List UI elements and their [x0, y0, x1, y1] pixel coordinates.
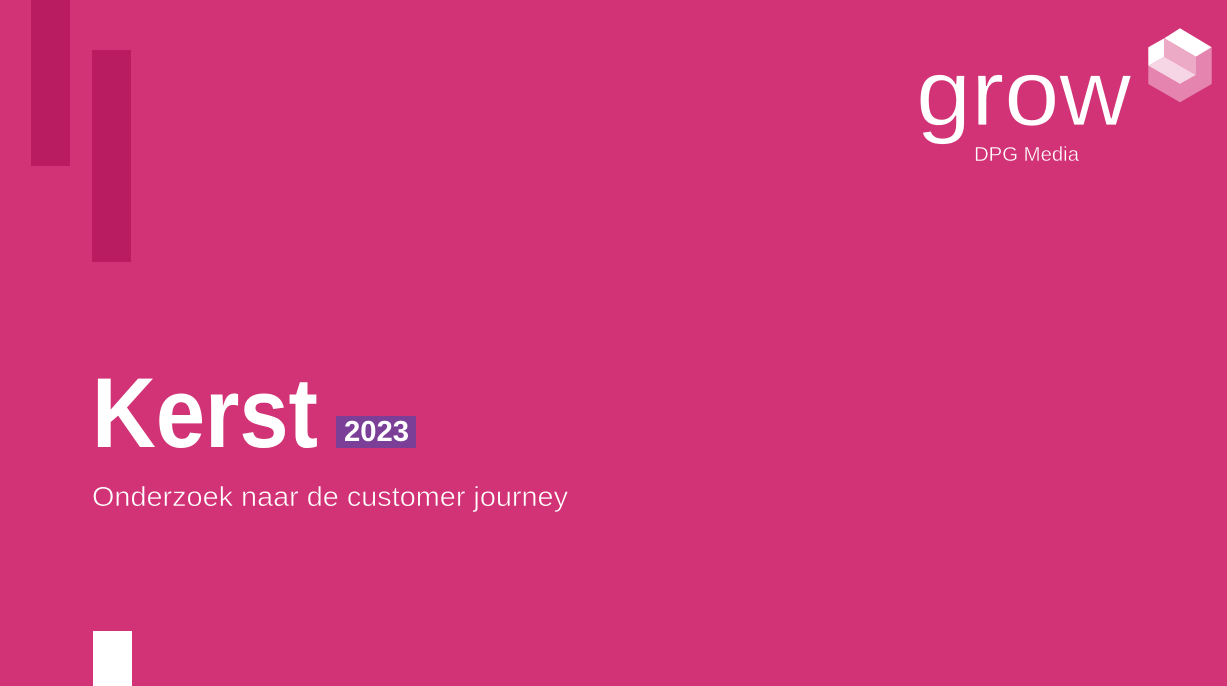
decorative bar: left dark pink: [31, 0, 70, 166]
decorative block: white bottom: [93, 631, 132, 686]
logo: grow DPG Media: [916, 28, 1212, 166]
logo subtitle: DPG Media: DPG Media: [974, 144, 1080, 166]
logo wordmark: grow: grow: [916, 40, 1132, 145]
decorative bar: middle dark pink: [92, 50, 131, 262]
icon: hexagonal cube: [1148, 28, 1212, 102]
subtitle: Onderzoek naar de customer journey: [92, 481, 568, 512]
title: Kerst: Kerst: [92, 357, 318, 468]
badge: 2023: 2023: [344, 416, 409, 448]
